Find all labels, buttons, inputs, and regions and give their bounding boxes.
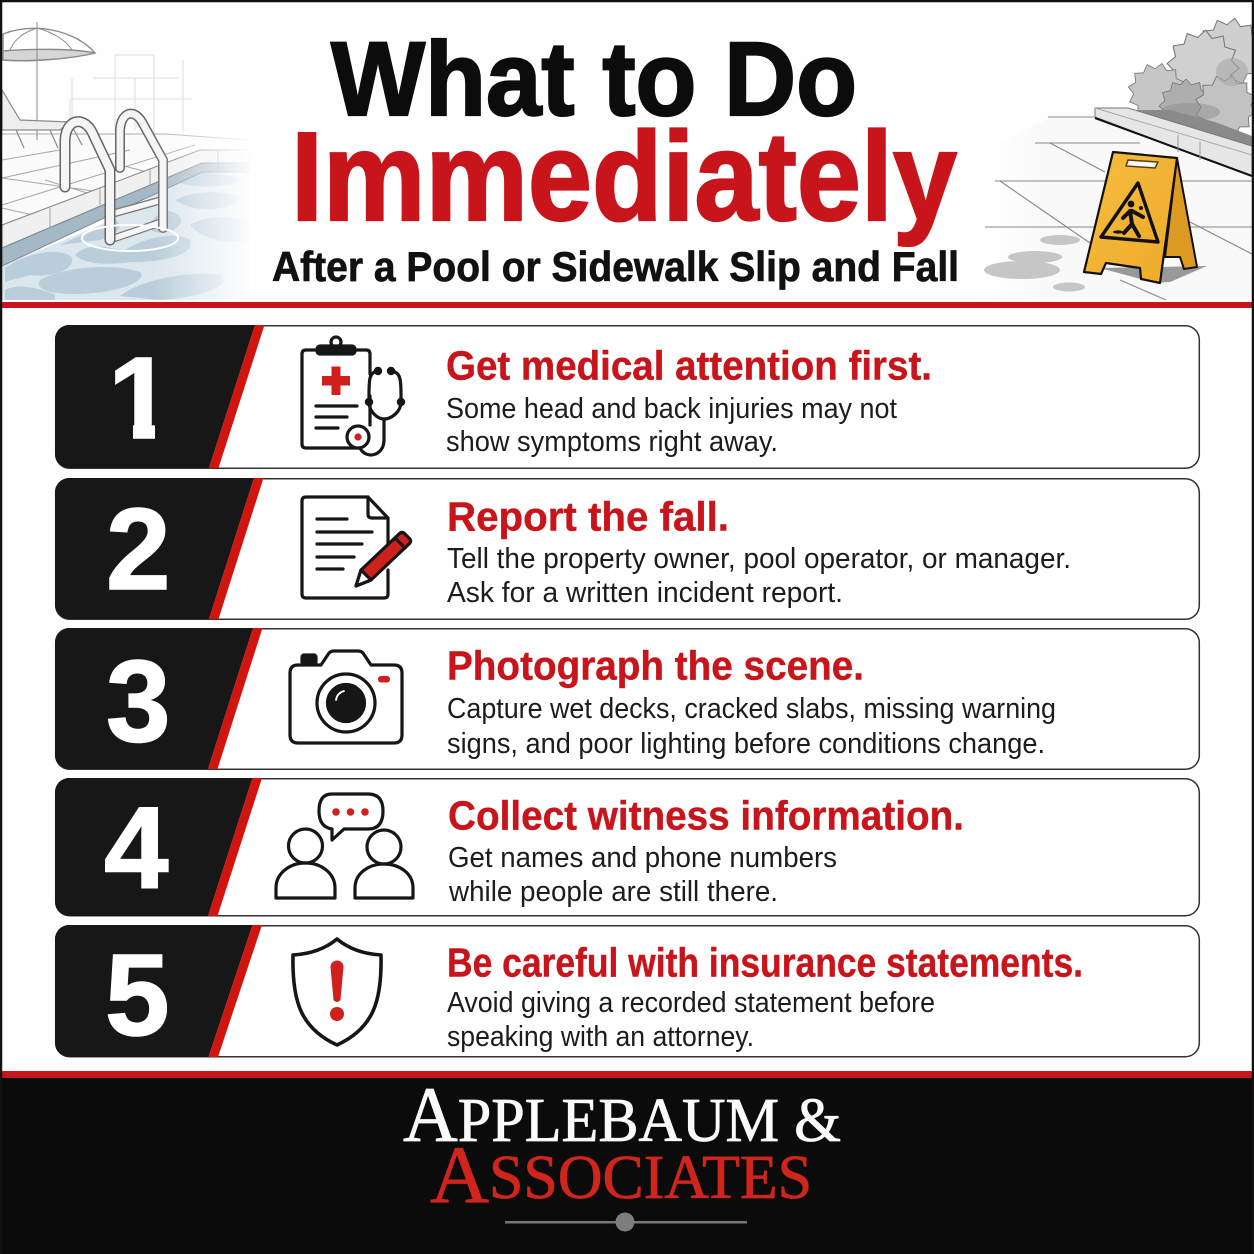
firm name line 2: SSOCIATES [489,1144,812,1212]
step 4 text [448,792,964,908]
firm name line 1: APPLEBAUM & [403,1071,841,1158]
step 5 panel [55,925,1199,1060]
illustration: sidewalk with wet floor sign [975,14,1254,300]
step 2 text [447,494,1071,609]
coping [2,150,250,248]
number badge: 4 [104,783,169,913]
title line 1: What to Do [331,21,857,138]
bushes [1123,14,1254,143]
subtitle: After a Pool or Sidewalk Slip and Fall [272,243,959,290]
number badge [55,778,262,916]
step 5 text: Be careful with insurance statements. [447,940,1083,986]
sign back [1165,158,1197,269]
step 4 panel [55,778,1199,916]
number badge: 2 [106,484,171,614]
step 2 text: Tell the property owner, pool operator, or manager. [447,543,1071,575]
icon: camera [290,651,402,743]
decorative slider divider [505,1212,747,1232]
step 1 text [446,342,932,458]
step 3 text: Photograph the scene. [447,642,864,688]
footer band [0,1071,1254,1254]
step 3 panel [55,628,1199,769]
number badge: 1 [108,333,173,463]
curb [1095,108,1252,176]
step 1 text: Some head and back injuries may not [446,393,897,425]
step 2 text: Report the fall. [447,494,729,540]
step 3 text: Capture wet decks, cracked slabs, missing warning [447,693,1056,725]
step 1 text: Get medical attention first. [446,342,932,388]
title line 2: Immediately [291,106,957,247]
icon: two people talking [276,794,413,898]
step 4 text: Collect witness information. [448,792,964,838]
firm name line 2: A [430,1129,489,1220]
icon: warning shield [293,939,381,1045]
number badge [55,628,262,769]
step 4 text: Get names and phone numbers [448,842,837,874]
number badge [55,478,264,619]
number badge: 3 [106,636,171,766]
umbrella [3,22,95,140]
slip figure [1113,201,1143,236]
step 5 text: speaking with an attorney. [447,1021,754,1053]
deck [2,135,250,226]
fade [0,130,254,302]
number badge [55,325,264,468]
number badge [55,925,262,1060]
lounge chair [2,90,82,148]
step 3 text: signs, and poor lighting before conditions change. [447,728,1045,760]
pool water [2,170,250,300]
water puddles [984,235,1085,292]
sign front [1084,152,1177,283]
step 2 text: Ask for a written incident report. [447,577,843,609]
step 4 text: while people are still there. [448,876,778,908]
step 1 text: show symptoms right away. [446,426,778,458]
title [272,21,959,290]
step 5 text: Avoid giving a recorded statement before [447,987,935,1019]
step 5 text [447,940,1083,1053]
illustration: pool with ladder and umbrella [0,22,254,302]
icon: document and pencil [302,497,410,598]
pavement [985,118,1252,298]
ladder [65,114,178,251]
icon: clipboard and stethoscope [302,337,404,455]
step 1 panel [55,325,1199,468]
step 2 panel [55,478,1199,619]
step 3 text [447,642,1056,760]
header rule [2,302,1252,308]
number badge: 5 [105,930,170,1060]
